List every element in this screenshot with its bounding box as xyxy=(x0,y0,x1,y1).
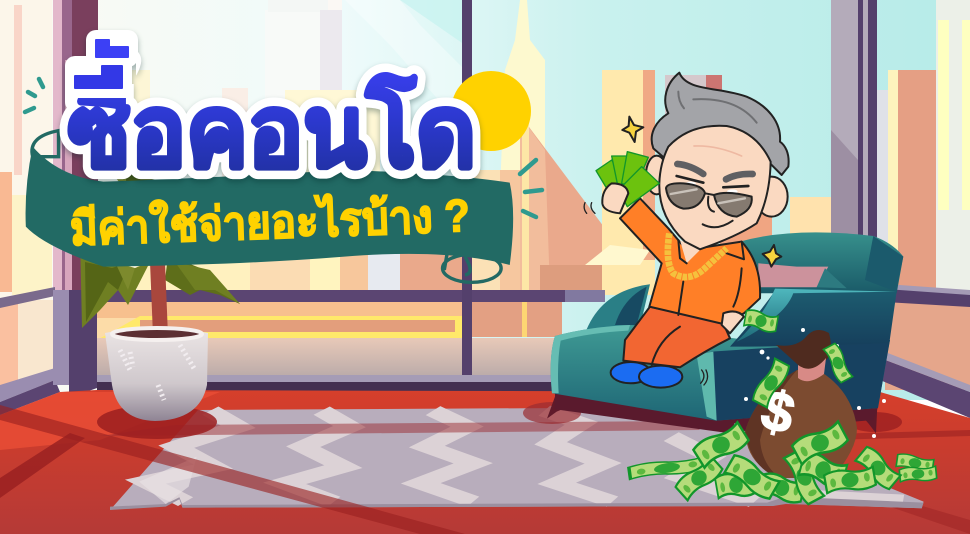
upper tone mark outline xyxy=(75,40,128,102)
eye lines xyxy=(677,176,748,187)
bag neck xyxy=(776,330,831,374)
character: old man in orange xyxy=(584,73,789,388)
sofa back xyxy=(740,232,903,293)
tone marks xyxy=(75,40,128,88)
title fill: ซื้อคอนโด xyxy=(68,58,476,188)
sofa xyxy=(547,232,903,433)
accent ticks xyxy=(25,79,542,217)
raised hand xyxy=(602,183,628,213)
plant trunk xyxy=(150,262,168,336)
rug xyxy=(110,407,924,510)
window frame: horizontal rail xyxy=(60,0,970,394)
sunglasses xyxy=(666,183,752,217)
left ear xyxy=(646,156,667,194)
motion lines xyxy=(584,203,708,385)
pot xyxy=(105,328,208,421)
sofa pillow xyxy=(758,263,828,287)
sparkle right xyxy=(763,245,781,267)
hair strands xyxy=(678,92,757,123)
sun xyxy=(451,71,531,151)
hair xyxy=(652,73,789,175)
window frame: left pillar xyxy=(0,0,98,415)
lens glare xyxy=(671,189,745,203)
legs xyxy=(623,307,730,367)
background: city through window xyxy=(0,0,970,400)
collar xyxy=(678,240,744,263)
nose and smile xyxy=(703,193,733,227)
hand on hip xyxy=(722,311,744,333)
torso xyxy=(620,198,760,324)
sofa seat and front xyxy=(551,325,890,421)
right ear xyxy=(756,177,788,217)
forehead wrinkles xyxy=(694,146,742,156)
window frame: right pillar xyxy=(831,0,970,418)
sofa left arm back xyxy=(587,284,650,329)
sofa legs xyxy=(547,397,877,433)
bag body xyxy=(745,370,857,478)
money bag xyxy=(734,328,886,478)
shoes xyxy=(611,362,682,388)
raised hand money fan xyxy=(596,152,659,207)
gold chain xyxy=(668,233,727,277)
light and shadow bars across rug and floor xyxy=(0,402,902,534)
sparkle left xyxy=(622,117,643,142)
title: ซื้อคอนโด xyxy=(68,40,476,188)
ribbon right curl xyxy=(443,250,501,282)
bag tie xyxy=(798,358,826,381)
face xyxy=(659,126,771,249)
title white outline: ซื้อคอนโด xyxy=(68,58,476,188)
eyebrows xyxy=(677,164,753,179)
ribbon body xyxy=(26,147,513,267)
eye highlights xyxy=(685,182,738,194)
ribbon banner xyxy=(26,131,513,282)
sparkles xyxy=(734,328,886,438)
dollar sign: $ xyxy=(755,377,801,446)
sofa base shadow xyxy=(555,393,878,433)
ribbon left curl xyxy=(32,131,59,157)
sofa right arm xyxy=(730,289,897,347)
floor xyxy=(0,390,970,534)
banknotes xyxy=(629,309,937,505)
plant leaves xyxy=(80,170,240,328)
potted plant xyxy=(80,170,240,421)
subtitle: มีค่าใช้จ่ายอะไรบ้าง ?: มีค่าใช้จ่ายอะไรบ้าง ? xyxy=(69,188,471,255)
